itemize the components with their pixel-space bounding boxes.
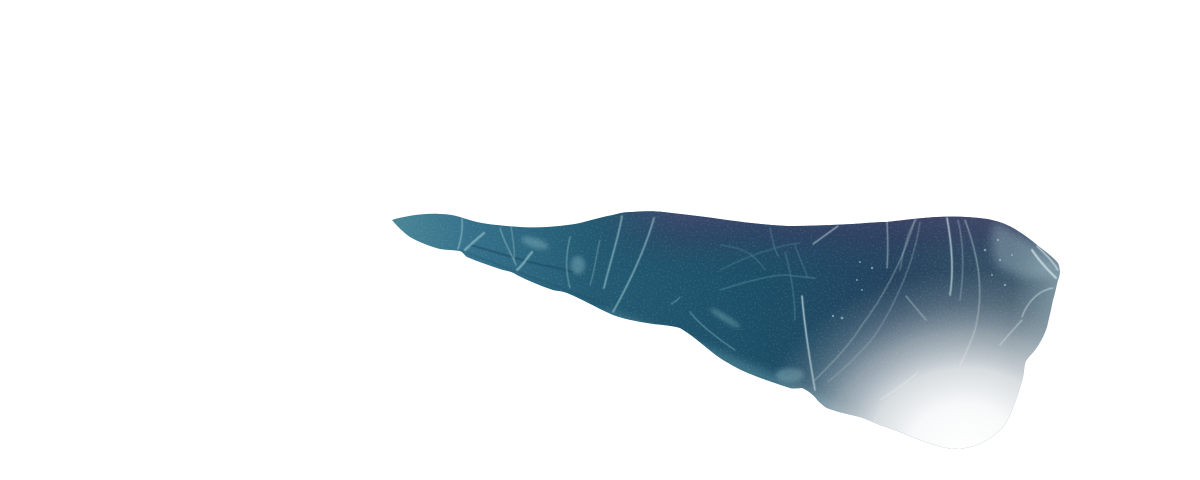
pale frost on head front: [992, 222, 1058, 278]
frost speckle near snout: [832, 239, 1013, 319]
whale body: [392, 211, 1060, 449]
white fade over lower head: [780, 280, 1050, 449]
scratches on head: [802, 218, 980, 400]
shading: lighter teal belly: [604, 309, 842, 412]
scratches on jaw: [458, 216, 735, 350]
frost grain texture: [396, 212, 1058, 404]
scratches on flank: [720, 228, 815, 320]
jaw dark line: [460, 244, 573, 288]
shading: dark purple back: [612, 211, 1059, 267]
illustration: sperm whale with ice texture fading into white: [392, 211, 1060, 449]
front lip highlight: [1000, 246, 1058, 345]
shading: pale jaw patches: [520, 234, 804, 382]
